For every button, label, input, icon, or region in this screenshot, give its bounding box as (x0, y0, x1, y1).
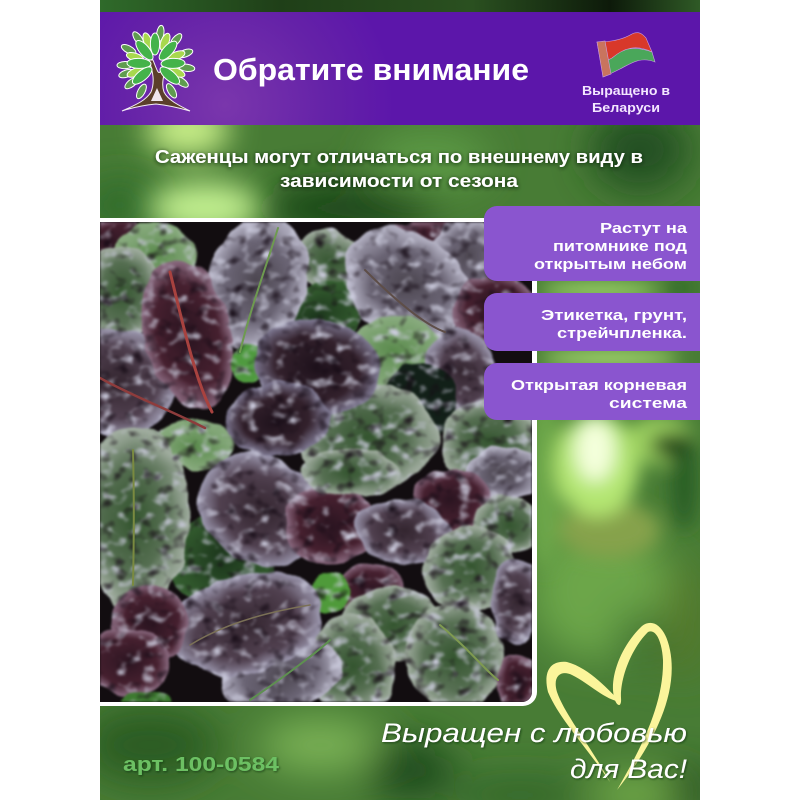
slogan (381, 718, 688, 784)
icon: tree logo (117, 25, 195, 111)
header band (100, 12, 700, 125)
pill: grown outdoors: Растут на (600, 220, 688, 237)
panel: feature pills (484, 206, 700, 420)
article number: арт. 100-0584 (123, 753, 280, 776)
pill: packaging: стрейчпленка. (557, 325, 687, 342)
slogan: Выращен с любовью (381, 718, 687, 748)
pill: packaging: Этикетка, грунт, (541, 307, 687, 324)
slogan: для Вас! (570, 754, 688, 784)
photo: ajuga leaves (100, 222, 532, 702)
icon: Belarus flag (597, 33, 655, 77)
photo frame (100, 218, 537, 706)
title: Обратите внимание (213, 52, 529, 87)
subtitle note (155, 147, 643, 191)
subtitle note: Саженцы могут отличаться по внешнему виду в (155, 147, 643, 167)
pill: grown outdoors (484, 206, 700, 281)
flag caption: Беларуси (592, 101, 660, 115)
icon: yellow heart (546, 623, 672, 790)
flag caption (582, 84, 670, 115)
pill: open root system (484, 363, 700, 420)
leaf midribs (100, 228, 498, 700)
pill: open root system: система (609, 395, 688, 412)
pill: grown outdoors: питомнике под (553, 238, 688, 255)
pill: packaging (484, 293, 700, 351)
subtitle note: зависимости от сезона (280, 171, 519, 191)
pill: open root system: Открытая корневая (511, 377, 687, 394)
flag caption: Выращено в (582, 84, 670, 98)
pill: grown outdoors: открытым небом (534, 256, 687, 273)
top strip (100, 0, 700, 12)
